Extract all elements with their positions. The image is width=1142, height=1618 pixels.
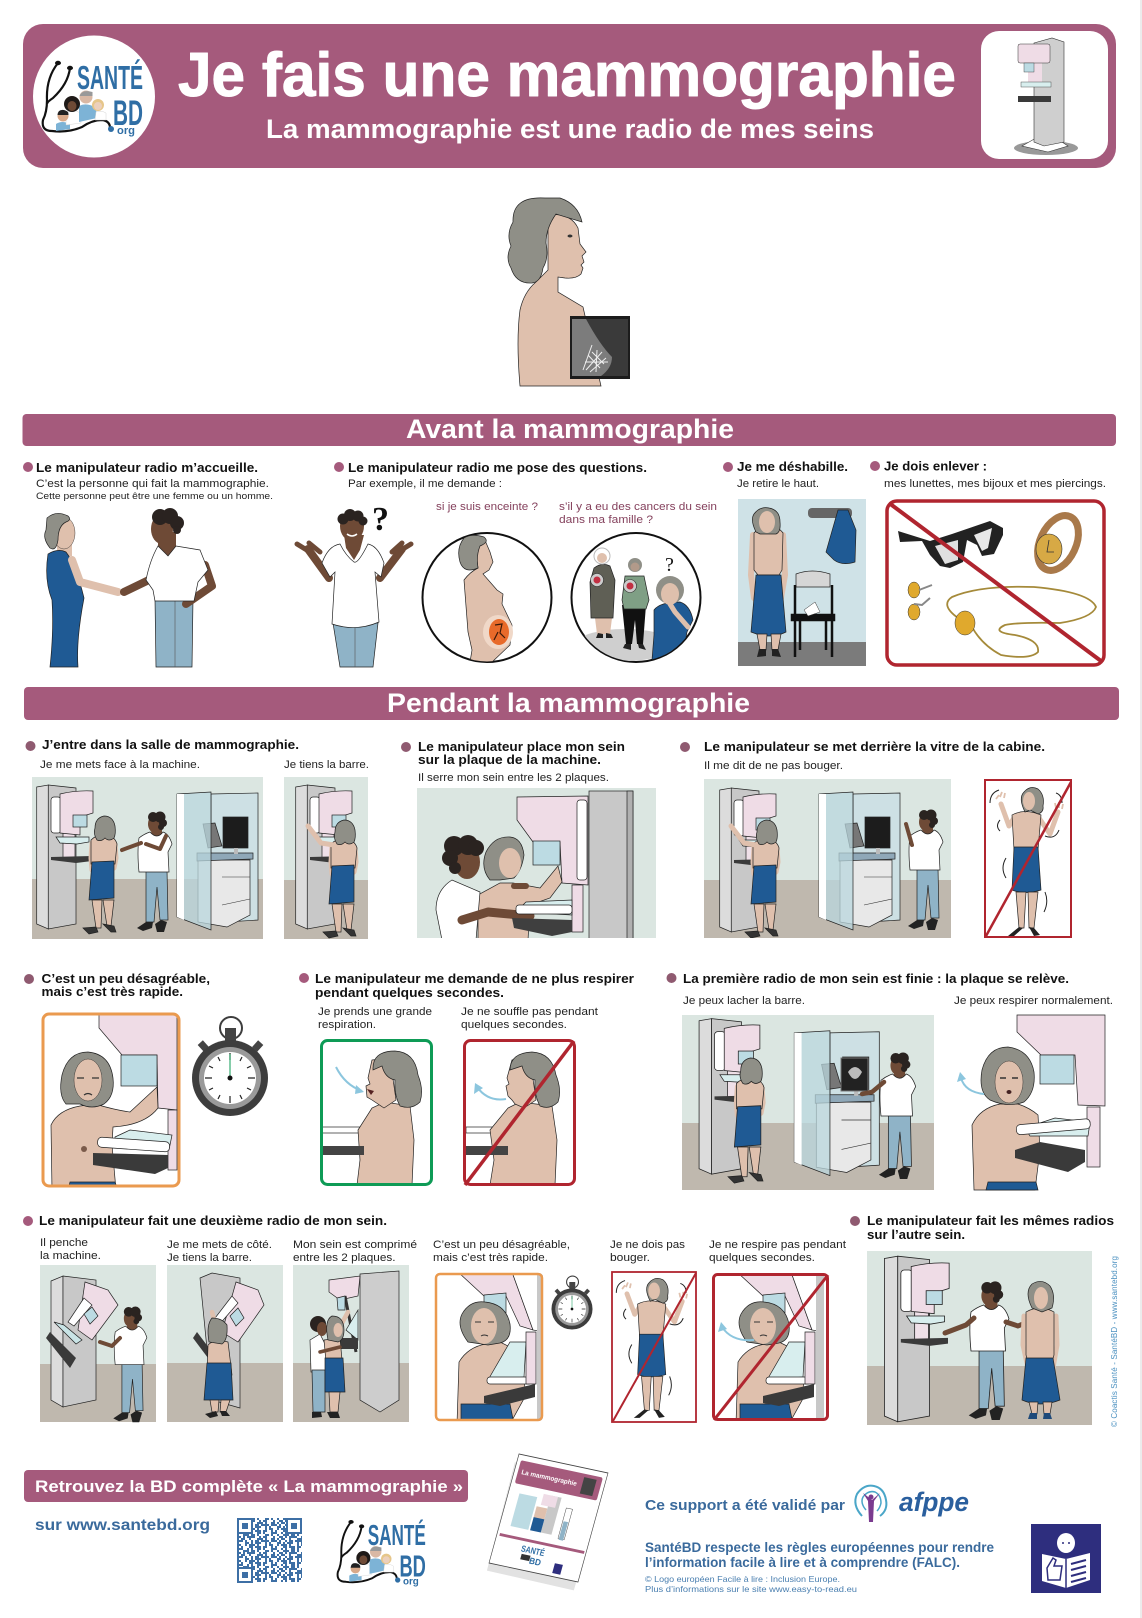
step: deuxième radio: entre les 2 plaques. bbox=[293, 1252, 396, 1264]
FALC statement bbox=[645, 1540, 994, 1594]
header banner bbox=[23, 24, 1116, 168]
step: ne plus respirer bbox=[299, 971, 634, 1186]
step: derrière la vitre: Le manipulateur se met derrière la vitre de la cabine. bbox=[704, 739, 1045, 754]
step: deuxième radio: Je ne respire pas pendant bbox=[709, 1239, 846, 1251]
panel: compression close-up bbox=[43, 1012, 179, 1190]
panel: room, facing machine bbox=[32, 777, 263, 939]
panel: do not move bbox=[612, 1272, 696, 1422]
step: plaque se relève bbox=[666, 971, 1113, 1190]
logo: SantéBD: BD bbox=[113, 94, 143, 133]
panel: machine tilted bbox=[40, 1265, 156, 1422]
icon: necklace bbox=[947, 587, 1096, 657]
step: entrée dans la salle: Je me mets face à la machine. bbox=[40, 759, 200, 771]
step: enlever bijoux bbox=[870, 458, 1106, 665]
step: plaque se relève: La première radio de mon sein est finie : la plaque se relève. bbox=[683, 971, 1069, 986]
icon: stopwatch bbox=[192, 1017, 268, 1116]
step: entrée dans la salle bbox=[26, 737, 369, 939]
step: deuxième radio: Mon sein est comprimé bbox=[293, 1239, 417, 1251]
circle: family history bbox=[572, 533, 700, 662]
step: questions: Par exemple, il me demande : bbox=[348, 478, 502, 490]
step: accueil: C’est la personne qui fait la mammographie. bbox=[36, 478, 269, 490]
step: autre sein: sur l’autre sein. bbox=[867, 1227, 965, 1242]
footer: call to action: Retrouvez la BD complète « La mammographie » bbox=[35, 1477, 463, 1496]
panel: technician positions breast bbox=[417, 788, 656, 941]
panel: do not breathe side bbox=[712, 1272, 829, 1424]
page edge bbox=[1140, 0, 1142, 1618]
panel: technician with patient bbox=[867, 1251, 1092, 1425]
footer: call to action bbox=[24, 1470, 468, 1534]
FALC statement: SantéBD respecte les règles européennes pour rendre bbox=[645, 1540, 994, 1555]
step: ne plus respirer: Je prends une grande bbox=[318, 1006, 432, 1018]
panel: deep breath bbox=[320, 1039, 432, 1186]
QR code bbox=[237, 1519, 302, 1582]
step: déshabillage bbox=[723, 459, 866, 666]
step: deuxième radio: mais c’est très rapide. bbox=[433, 1252, 548, 1264]
panel: do not move bbox=[985, 780, 1071, 937]
logo: SantéBD footer: org bbox=[403, 1576, 419, 1587]
logo: SantéBD footer: SANTÉ bbox=[368, 1518, 426, 1552]
step: autre sein: Le manipulateur fait les mêmes radios bbox=[867, 1213, 1114, 1228]
logo: SantéBD: org bbox=[117, 125, 135, 137]
question: enceinte: si je suis enceinte ? bbox=[436, 501, 538, 513]
illustration: man shrugging: ? bbox=[372, 501, 389, 538]
icon: afppe bbox=[855, 1486, 886, 1522]
step: derrière la vitre bbox=[680, 739, 1071, 938]
step: ne plus respirer: quelques secondes. bbox=[461, 1019, 567, 1031]
panel: technician behind glass bbox=[704, 779, 951, 938]
panel: standing sideways bbox=[167, 1265, 283, 1422]
step: accueil: Le manipulateur radio m’accueille. bbox=[36, 460, 258, 475]
question: cancers: s’il y a eu des cancers du sein bbox=[559, 501, 717, 513]
question: cancers: dans ma famille ? bbox=[559, 514, 653, 526]
step: entrée dans la salle: Je tiens la barre. bbox=[284, 759, 369, 771]
question: cancers bbox=[559, 501, 717, 526]
step: deuxième radio: Je me mets de côté. bbox=[167, 1239, 272, 1251]
step: désagréable mais rapide bbox=[24, 971, 268, 1190]
FALC statement: l’information facile à lire et à comprendre (FALC). bbox=[645, 1555, 960, 1570]
panel: technician at console bbox=[682, 1015, 934, 1190]
step: déshabillage: Je me déshabille. bbox=[737, 459, 848, 474]
step: deuxième radio: Il penche bbox=[40, 1237, 88, 1249]
section band: Pendant la mammographie bbox=[24, 687, 1119, 720]
panel: undressing room bbox=[738, 499, 866, 666]
logo: SantéBD: SANTÉ bbox=[77, 59, 143, 96]
copyright vertical: © Coactis Santé - SantéBD - www.santebd.org bbox=[1110, 1256, 1119, 1427]
booklet cover: BD bbox=[528, 1556, 542, 1568]
step: deuxième radio: la machine. bbox=[40, 1250, 101, 1262]
step: deuxième radio: bouger. bbox=[610, 1252, 650, 1264]
booklet cover: La mammographie bbox=[520, 1469, 578, 1488]
illustration: handshake bbox=[45, 508, 212, 667]
step: place le sein bbox=[401, 739, 656, 941]
icon: glasses bbox=[898, 521, 1003, 568]
step: plaque se relève: Je peux respirer normalement. bbox=[954, 995, 1113, 1007]
panel: compression side close-up bbox=[435, 1272, 545, 1424]
subtitle: La mammographie est une radio de mes seins bbox=[266, 114, 874, 144]
logo: SantéBD bbox=[33, 36, 155, 158]
step: entrée dans la salle: J’entre dans la salle de mammographie. bbox=[42, 737, 299, 752]
step: ne plus respirer: Le manipulateur me demande de ne plus respirer bbox=[315, 971, 634, 986]
section band: Pendant la mammographie: Pendant la mammographie bbox=[387, 688, 750, 718]
step: plaque se relève: Je peux lacher la barre. bbox=[683, 995, 805, 1007]
figure: woman front bbox=[1022, 1281, 1060, 1419]
booklet cover: SANTÉ bbox=[520, 1543, 546, 1558]
icon: mammography machine bbox=[981, 31, 1108, 159]
panel: breathing normally bbox=[957, 1015, 1105, 1190]
step: enlever bijoux: Je dois enlever : bbox=[884, 458, 987, 474]
step: enlever bijoux: mes lunettes, mes bijoux et mes piercings. bbox=[884, 478, 1106, 490]
step: deuxième radio: C’est un peu désagréable, bbox=[433, 1239, 570, 1251]
step: place le sein: sur la plaque de la machine. bbox=[418, 752, 601, 767]
logo: easy to read bbox=[1031, 1524, 1101, 1593]
step: questions: Le manipulateur radio me pose des questions. bbox=[348, 460, 647, 475]
step: deuxième radio: Le manipulateur fait une deuxième radio de mon sein. bbox=[39, 1213, 387, 1228]
validation afppe: Ce support a été validé par bbox=[645, 1498, 845, 1514]
FALC statement: © Logo européen Facile à lire : Inclusion Europe. bbox=[645, 1574, 840, 1584]
panel: breast compressed side view bbox=[293, 1265, 409, 1422]
icon: small stopwatch bbox=[551, 1276, 593, 1330]
circle: pregnant woman bbox=[422, 533, 552, 664]
validation afppe: afppe bbox=[899, 1487, 969, 1517]
step: ne plus respirer: Je ne souffle pas pendant bbox=[461, 1006, 598, 1018]
step: deuxième radio: Je ne dois pas bbox=[610, 1239, 686, 1251]
logo: SantéBD footer: BD bbox=[399, 1548, 426, 1583]
step: place le sein: Il serre mon sein entre les 2 plaques. bbox=[418, 772, 609, 784]
illustration: man shrugging bbox=[297, 501, 411, 667]
footer: call to action: sur www.santebd.org bbox=[35, 1517, 210, 1534]
section band: Avant la mammographie: Avant la mammographie bbox=[406, 414, 734, 444]
validation afppe bbox=[645, 1486, 969, 1522]
step: autre sein bbox=[850, 1213, 1114, 1425]
panel: holding breath bbox=[463, 1039, 575, 1186]
step: ne plus respirer: pendant quelques secondes. bbox=[315, 985, 504, 1000]
step: derrière la vitre: Il me dit de ne pas bouger. bbox=[704, 760, 843, 772]
circle: family history: ? bbox=[665, 554, 674, 576]
step: questions bbox=[297, 460, 717, 667]
title: Je fais une mammographie bbox=[178, 41, 956, 110]
step: déshabillage: Je retire le haut. bbox=[737, 478, 819, 490]
step: désagréable mais rapide: C’est un peu désagréable, bbox=[42, 971, 210, 986]
step: désagréable mais rapide: mais c’est très rapide. bbox=[42, 984, 183, 999]
step: accueil: Cette personne peut être une femme ou un homme. bbox=[36, 491, 273, 502]
panel: holding the bar bbox=[284, 777, 368, 939]
section band: Avant la mammographie bbox=[22, 414, 1116, 446]
step: accueil bbox=[23, 460, 273, 667]
booklet cover bbox=[485, 1454, 608, 1591]
FALC statement: Plus d’informations sur le site www.easy-to-read.eu bbox=[645, 1584, 857, 1594]
step: ne plus respirer: respiration. bbox=[318, 1019, 376, 1031]
step: deuxième radio bbox=[23, 1213, 846, 1424]
step: place le sein: Le manipulateur place mon sein bbox=[418, 739, 625, 754]
logo: SantéBD footer bbox=[338, 1518, 426, 1587]
illustration: woman in profile with breast x-ray bbox=[508, 198, 630, 386]
panel: forbidden items bbox=[887, 501, 1104, 665]
step: deuxième radio: quelques secondes. bbox=[709, 1252, 815, 1264]
step: deuxième radio: Je tiens la barre. bbox=[167, 1252, 252, 1264]
icon: watch bbox=[1029, 509, 1087, 577]
icon: earrings bbox=[908, 582, 932, 620]
